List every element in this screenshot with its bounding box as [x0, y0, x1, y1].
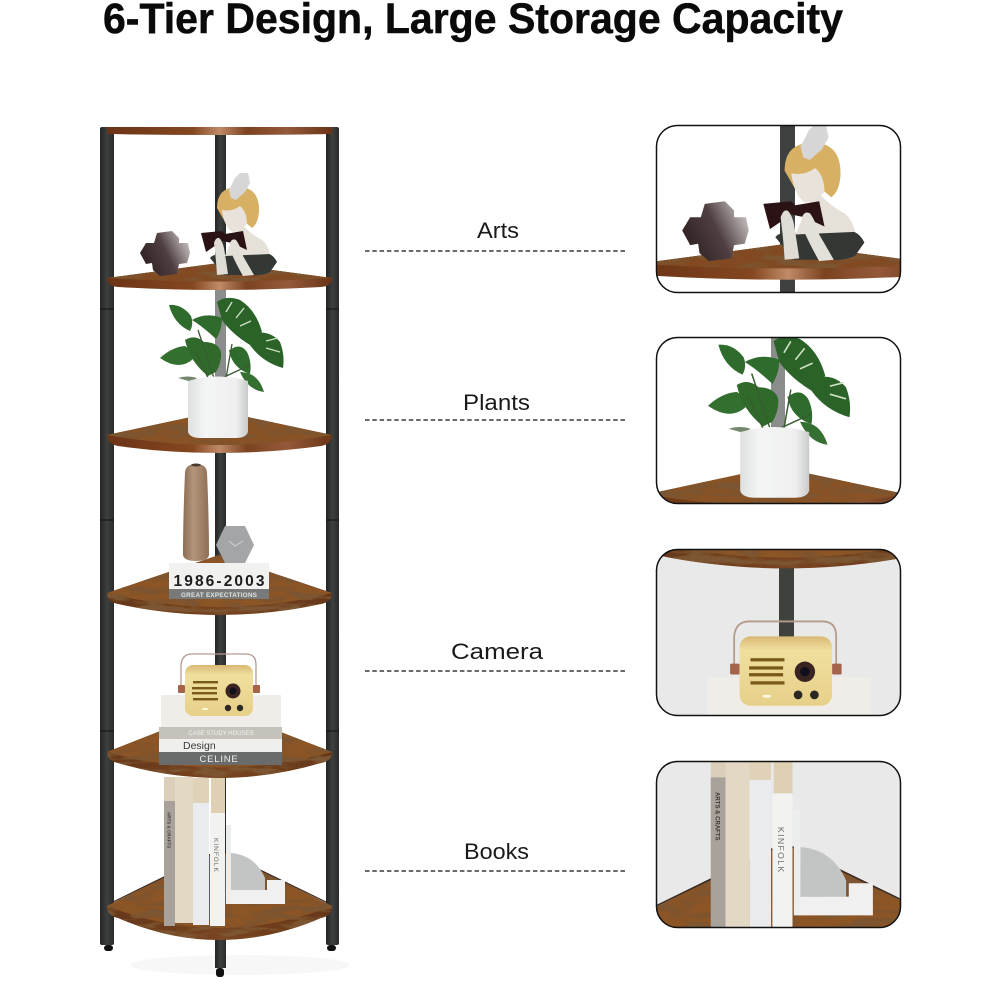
decor: reading girl sculpture	[201, 173, 277, 276]
decor: upright books and bookend	[164, 777, 285, 926]
frame posts	[100, 127, 339, 977]
shelf 5	[107, 708, 332, 778]
floor shadow	[130, 955, 350, 975]
decor: gold retro radio	[178, 654, 260, 716]
decor: book stack	[159, 695, 282, 765]
decor: wooden vase	[183, 464, 209, 561]
label: Camera: Camera	[451, 639, 544, 664]
panel: camera close-up	[656, 548, 902, 716]
decor: geometric cross	[140, 231, 190, 276]
panel: arts close-up	[656, 124, 902, 294]
decor: book 1986-2003	[169, 563, 269, 599]
label: Arts: Arts	[477, 218, 519, 243]
decor: monstera plant in white pot	[160, 298, 284, 438]
decor: book 1986-2003: GREAT EXPECTATIONS	[181, 592, 257, 599]
panel: plants close-up	[656, 336, 902, 504]
label: Books: Books	[464, 839, 529, 864]
shelf 6	[107, 850, 332, 940]
decor: book stack: CELINE	[199, 754, 239, 765]
label: Plants: Plants	[463, 390, 530, 415]
shelf 1 top	[107, 127, 332, 135]
shelf 3	[107, 411, 332, 453]
decor: book 1986-2003: 1986-2003	[174, 573, 265, 590]
panel: books close-up	[656, 760, 902, 928]
corner shelf unit with decor	[100, 127, 350, 977]
decor: hexagonal clock	[216, 526, 254, 563]
decor: book stack: CASE STUDY HOUSES	[188, 731, 254, 737]
decor: upright books and bookend: ARTS & CRAFTS	[166, 812, 172, 848]
decor: book stack: Design	[183, 740, 216, 752]
shelf 4	[107, 555, 332, 615]
shelf 2	[107, 263, 332, 290]
decor: upright books and bookend: KINFOLK	[212, 838, 219, 873]
